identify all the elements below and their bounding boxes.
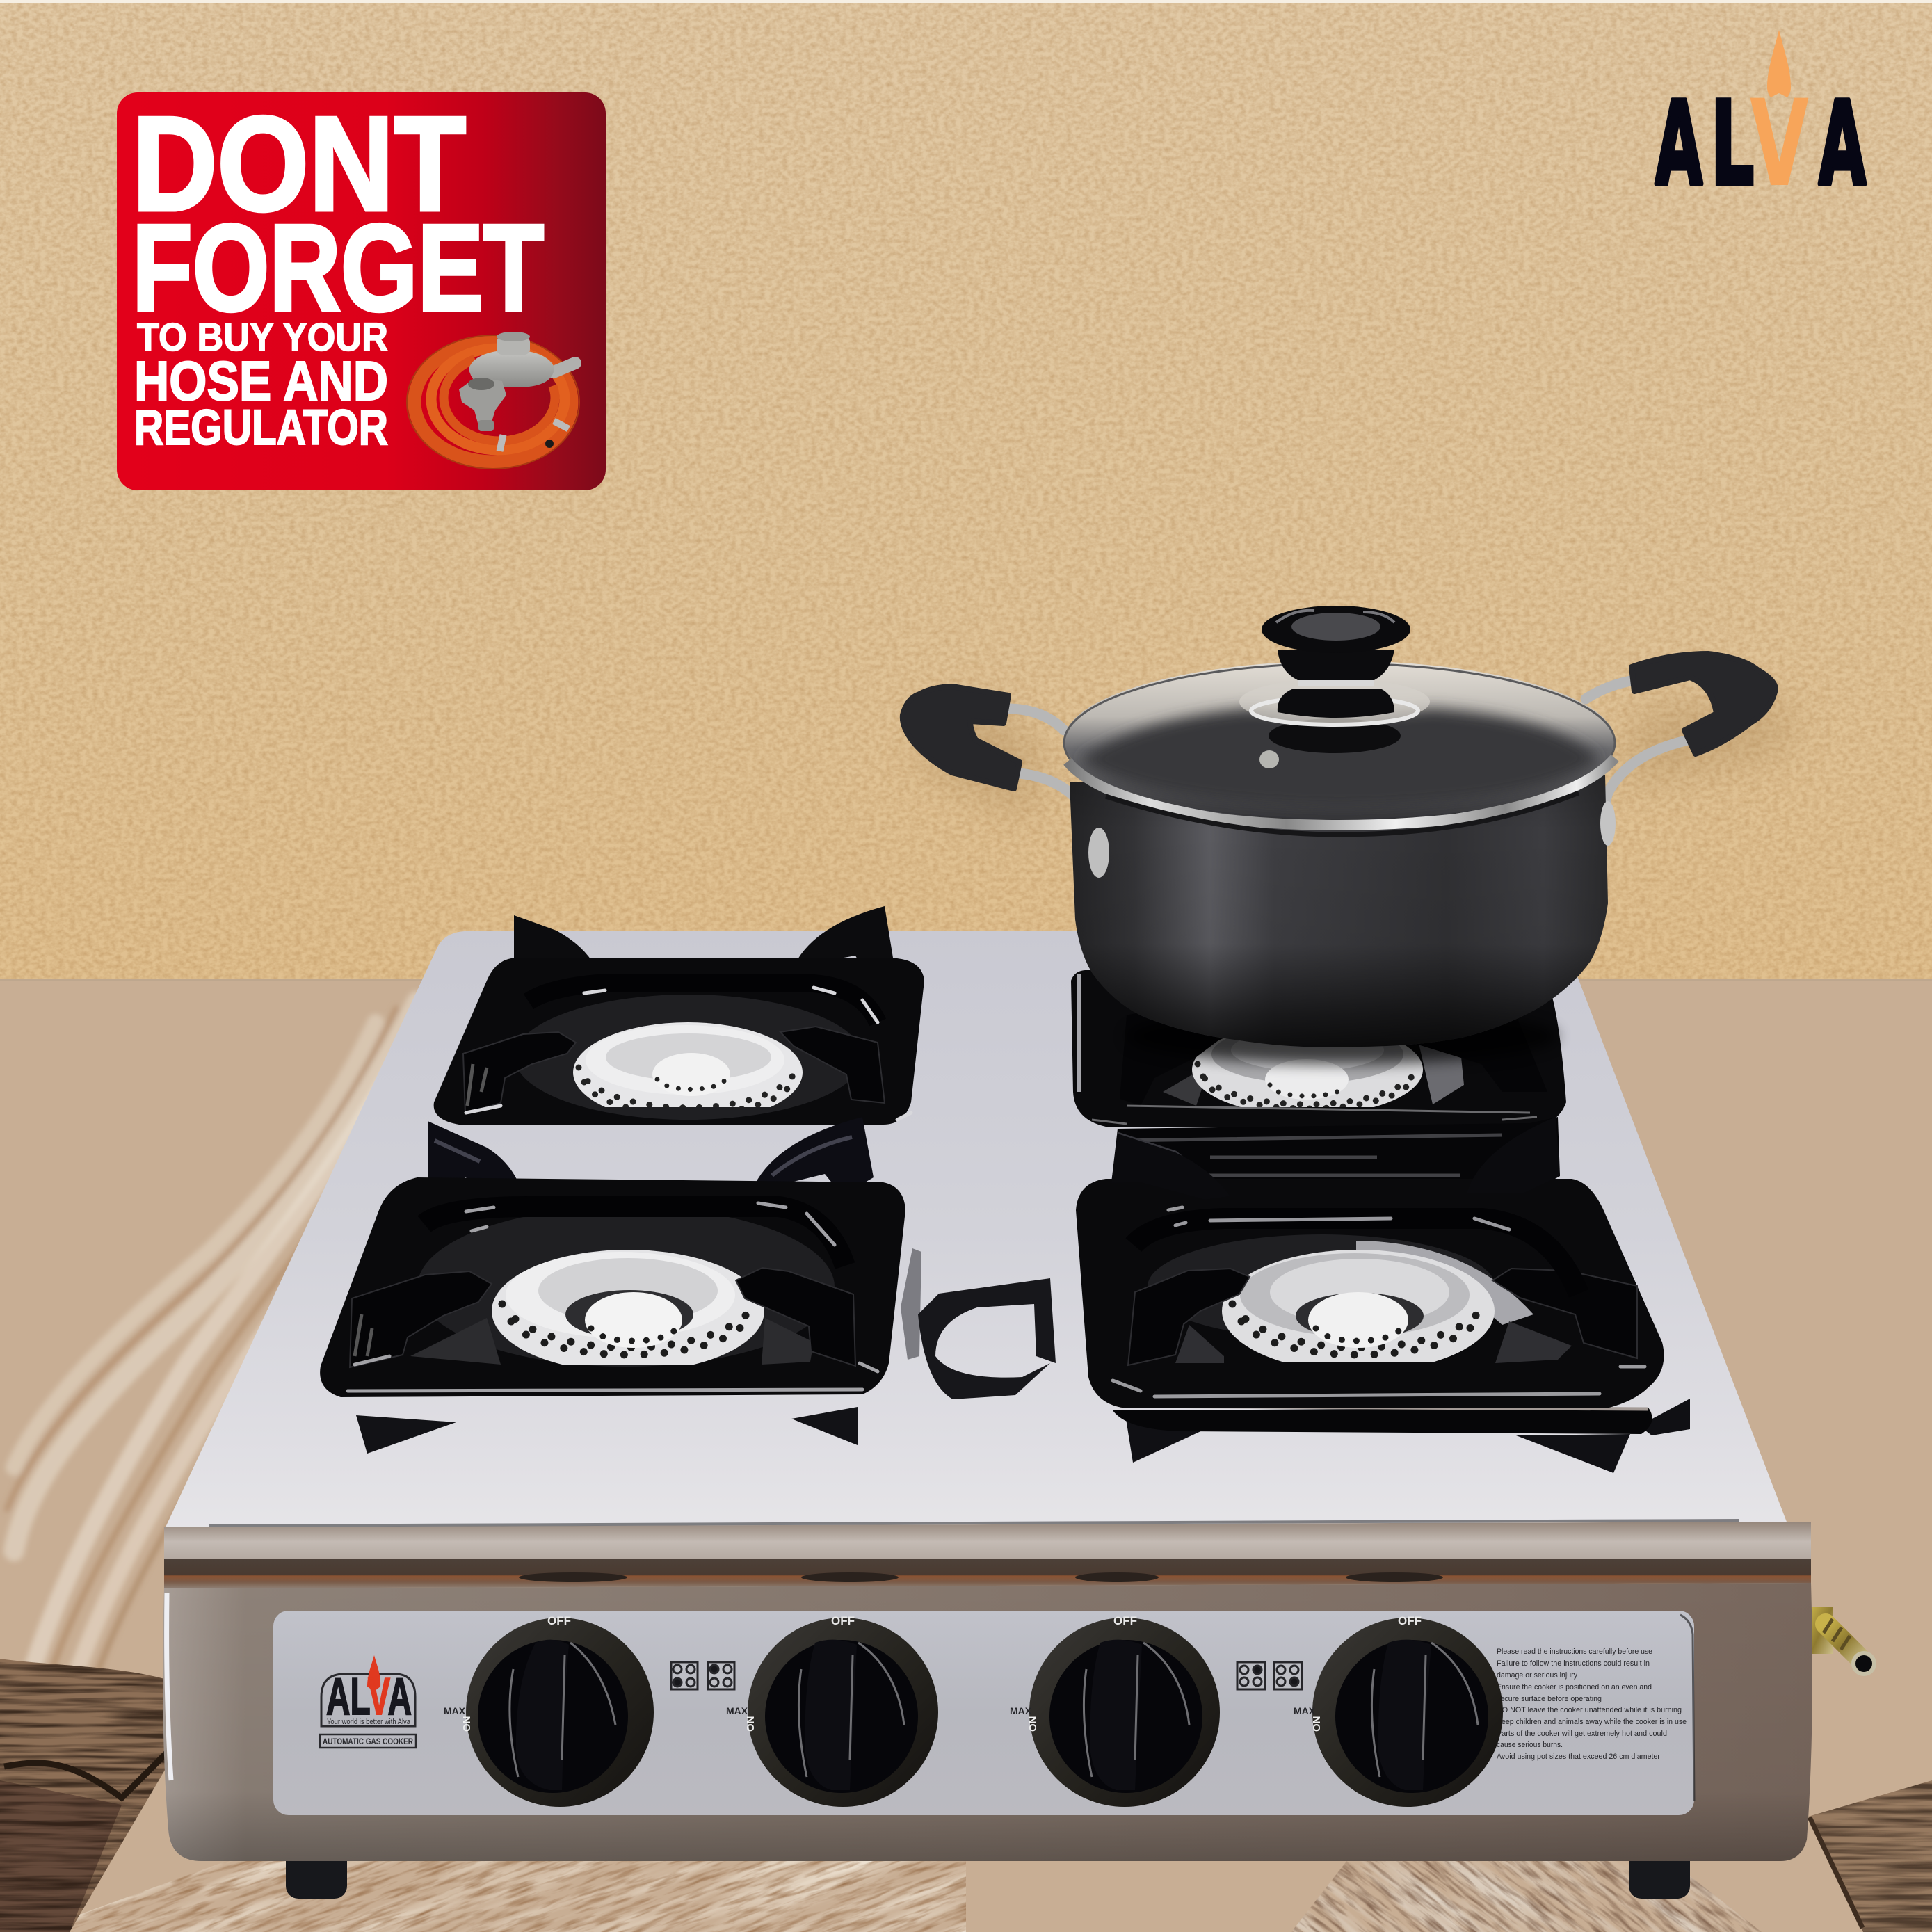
burner: back right xyxy=(1071,970,1566,1127)
knob 3 MAX label: MAX xyxy=(1010,1705,1032,1716)
badge heading: FORGET: FORGET xyxy=(132,199,544,337)
back-left enamel pan xyxy=(434,958,924,1125)
burner: front right xyxy=(1076,1117,1690,1473)
lid knob base ring xyxy=(1239,679,1430,725)
back-right burner head xyxy=(1192,1024,1423,1116)
stainless cooktop surface xyxy=(164,931,1789,1530)
background: beige plaster wall xyxy=(0,0,1932,981)
wood plank: dark lower right xyxy=(1808,1780,1932,1932)
pot handle: left wires xyxy=(1010,709,1103,878)
back-right pan arms xyxy=(1120,1001,1547,1106)
knob 4 OFF label: OFF xyxy=(1398,1614,1422,1627)
pot body xyxy=(1070,775,1608,1047)
pot rivet: left xyxy=(1088,828,1109,878)
front-right lower rail and fins xyxy=(1126,1399,1690,1473)
safety instructions text: secure surface before operating xyxy=(1497,1695,1602,1703)
panel top slots xyxy=(519,1572,1443,1582)
knob 4 MAX label: MAX xyxy=(1294,1705,1316,1716)
badge line: HOSE AND: HOSE AND xyxy=(134,350,388,412)
lid knob top xyxy=(1262,606,1410,653)
cooker front panel xyxy=(163,1572,1812,1861)
ALVA brand logo xyxy=(1655,30,1866,214)
shadow of pot handles on wall xyxy=(911,695,1794,821)
background: wood table top xyxy=(0,979,1932,1932)
lid knob stem xyxy=(1278,650,1394,718)
plate logo: Alva: Your world is better with Alva xyxy=(327,1718,411,1726)
safety instructions text: Please read the instructions carefully before use xyxy=(1497,1648,1652,1656)
reflection: front-left pan on cooktop xyxy=(356,1407,858,1454)
safety instructions text: Parts of the cooker will get extremely hot and could xyxy=(1497,1730,1667,1738)
burner: front left xyxy=(320,1117,905,1397)
cooking pot with glass lid xyxy=(903,606,1776,1064)
front-left burner head xyxy=(492,1250,764,1372)
control knob 2 xyxy=(726,1614,938,1807)
knob 2 MAX label: MAX xyxy=(726,1705,748,1716)
logo letter V: V xyxy=(1750,74,1809,214)
red callout badge xyxy=(117,88,606,490)
safety instructions text: Failure to follow the instructions could result in xyxy=(1497,1659,1650,1668)
front-left pan support fins xyxy=(428,1117,874,1199)
foot: left xyxy=(286,1843,347,1899)
badge line: TO BUY YOUR: TO BUY YOUR xyxy=(137,315,388,360)
knob 4 ON label: ON xyxy=(1311,1716,1323,1732)
wood plank: dark lower left xyxy=(0,1659,167,1932)
front-right fins upper xyxy=(1111,1117,1560,1200)
plate logo: Alva: AUTOMATIC GAS COOKER xyxy=(323,1737,413,1746)
knob 3 ON label: ON xyxy=(1027,1716,1039,1732)
safety instructions text: damage or serious injury xyxy=(1497,1671,1577,1680)
back-left pan support fins xyxy=(514,906,893,995)
pot handle: left grip xyxy=(903,686,1020,789)
pot lid glass xyxy=(1064,661,1615,821)
safety instructions text: Keep children and animals away while the cooker is in use xyxy=(1497,1718,1687,1726)
front-right burner head xyxy=(1222,1250,1495,1372)
logo letter A: A xyxy=(1655,77,1702,211)
plate logo: Alva: ALVA xyxy=(326,1667,412,1725)
logo letter L: L xyxy=(1711,77,1754,211)
front-right enamel pan xyxy=(1076,1179,1664,1408)
icon: orange hose and gas regulator xyxy=(407,332,579,469)
control label plate xyxy=(273,1611,1694,1815)
cooker front lip xyxy=(164,1520,1811,1588)
front-left pan arms xyxy=(350,1268,855,1367)
knob 1 MAX label: MAX xyxy=(444,1705,466,1716)
plate logo: Alva xyxy=(320,1655,416,1748)
logo letter A (second): A xyxy=(1819,77,1866,211)
knob 1 ON label: ON xyxy=(461,1716,473,1732)
pot handle: right wires xyxy=(1586,680,1686,846)
knob 3 OFF label: OFF xyxy=(1113,1614,1137,1627)
pot handle: right grip xyxy=(1632,654,1776,754)
gas inlet fitting xyxy=(1810,1607,1876,1676)
lid vent dot xyxy=(1259,750,1279,768)
front-right pan arms xyxy=(1128,1269,1637,1365)
burner selector icons: pair one xyxy=(671,1662,734,1689)
control knob 3 xyxy=(1010,1614,1220,1807)
front-right upper rail and fins xyxy=(1111,1117,1560,1200)
badge line: REGULATOR: REGULATOR xyxy=(134,401,388,456)
control knob 1 xyxy=(444,1614,654,1807)
logo flame xyxy=(1767,30,1791,97)
knob 2 ON label: ON xyxy=(745,1716,757,1732)
front-left enamel pan xyxy=(320,1177,905,1397)
pot shadow on pan xyxy=(1127,1008,1558,1064)
burner selector icons: pair two xyxy=(1237,1662,1302,1689)
safety instructions text xyxy=(1497,1648,1687,1761)
knob 1 OFF label: OFF xyxy=(547,1614,571,1627)
safety instructions text: Avoid using pot sizes that exceed 26 cm diameter xyxy=(1497,1753,1660,1761)
control knob 4 xyxy=(1294,1614,1503,1807)
reflection: pot handle in cooktop xyxy=(901,1248,1056,1399)
back-left burner head xyxy=(573,1022,803,1107)
foot: right xyxy=(1629,1843,1690,1899)
safety instructions text: DO NOT leave the cooker unattended while it is burning xyxy=(1497,1706,1682,1714)
safety instructions text: cause serious burns. xyxy=(1497,1741,1563,1749)
badge heading: DONT: DONT xyxy=(132,88,466,239)
back-right enamel pan xyxy=(1071,970,1566,1127)
pot rivet: right xyxy=(1600,801,1616,846)
pot rim xyxy=(1064,663,1615,822)
knob 2 OFF label: OFF xyxy=(831,1614,855,1627)
back-left pan arms xyxy=(463,1027,885,1113)
burner: back left xyxy=(434,906,924,1125)
lid knob reflection xyxy=(1269,718,1401,753)
safety instructions text: Ensure the cooker is positioned on an even and xyxy=(1497,1683,1652,1691)
